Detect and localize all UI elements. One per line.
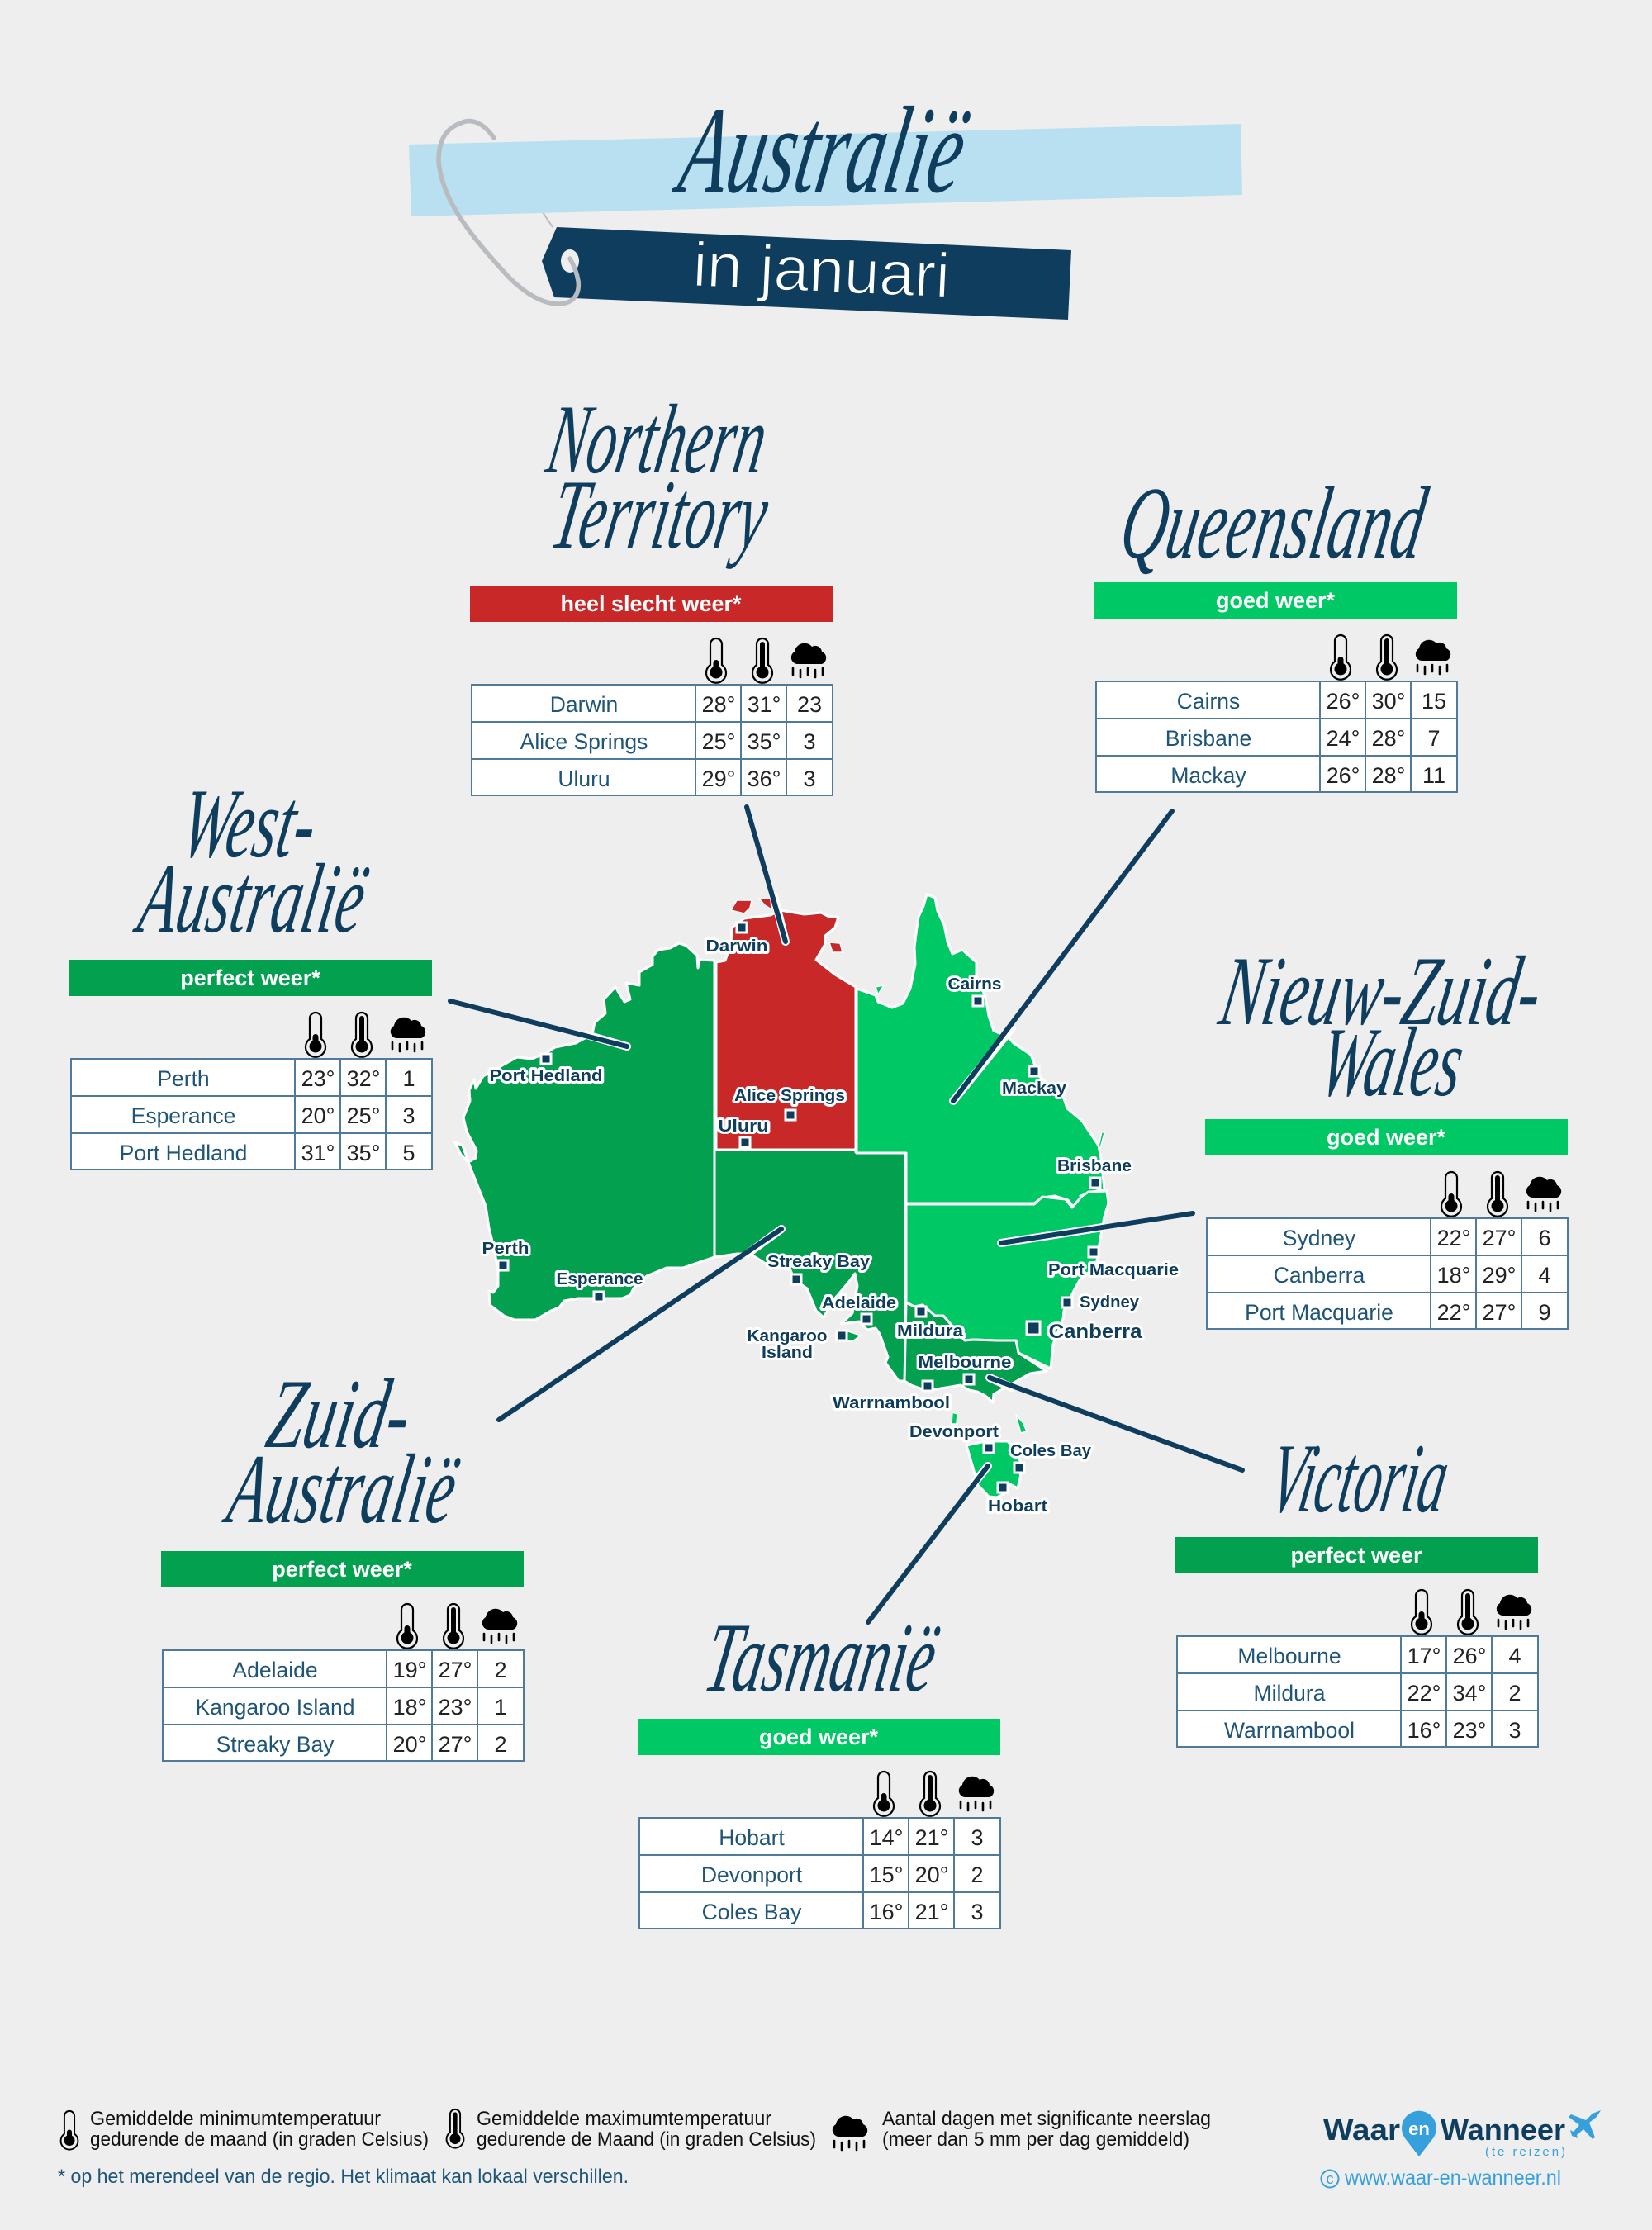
city: Hobart: Hobart (988, 1497, 1047, 1516)
city: Melbourne (919, 1354, 1011, 1384)
map of Australia (455, 894, 1108, 1497)
region: Victoria (904, 1302, 1047, 1402)
table: cities: 22° (1408, 1681, 1441, 1706)
rating: perfect weer: perfect weer* (180, 966, 320, 990)
table: cities: Kangaroo Island (195, 1695, 355, 1720)
city markers and labels (482, 923, 1179, 1516)
tag: in januari: in januari (691, 230, 952, 311)
city: Alice Springs (734, 1087, 845, 1120)
city: Kangaroo Island: Kangaroo (747, 1327, 828, 1345)
table: cities: 1 (402, 1066, 415, 1091)
table: cities (1177, 1636, 1538, 1747)
table: cities: Perth (157, 1066, 210, 1091)
icon: map pin (1402, 2111, 1436, 2156)
table: cities (1207, 1218, 1568, 1329)
leader: Queensland (953, 811, 1172, 1101)
city: Brisbane (1057, 1157, 1132, 1188)
city: Mildura (897, 1307, 964, 1340)
leader: Victoria (990, 1378, 1242, 1470)
table: cities (639, 1818, 1000, 1929)
panel: Victoria (1175, 1424, 1538, 1747)
table: cities: 26° (1453, 1644, 1486, 1668)
table: cities: 36° (748, 766, 781, 791)
city: Devonport (909, 1423, 999, 1453)
table: cities: Esperance (131, 1103, 235, 1128)
table: cities: 4 (1538, 1263, 1551, 1288)
rating: perfect weer: perfect weer (1290, 1543, 1422, 1568)
footnote: * op het merendeel van de regio. Het klimaat kan lokaal verschillen. (58, 2166, 629, 2188)
legend: minimum temperature: Gemiddelde minimumtemperatuur (90, 2108, 381, 2130)
table: cities: Warrnambool (1224, 1718, 1355, 1743)
table: cities: Devonport (701, 1862, 803, 1887)
city: Melbourne: Melbourne (919, 1354, 1011, 1372)
table: cities: 35° (347, 1141, 380, 1165)
column icons (1412, 1590, 1531, 1635)
table: cities: 3 (803, 729, 816, 754)
table: cities: Coles Bay (702, 1900, 802, 1924)
city: Adelaide: Adelaide (822, 1294, 896, 1312)
city: Perth (482, 1240, 529, 1270)
panel: Nieuw-Zuid-Wales (1205, 937, 1568, 1329)
logo: Waar en Wanneer: Wanneer (1441, 2113, 1565, 2147)
table: cities: 21° (915, 1900, 948, 1924)
table: cities: 7 (1427, 726, 1441, 751)
website link: www.waar-en-wanneer.nl (1344, 2166, 1561, 2190)
table: cities: 24° (1327, 726, 1360, 751)
table: cities: Port Hedland (120, 1141, 247, 1165)
table: cities: 4 (1508, 1644, 1521, 1668)
logo: Waar en Wanneer: en (1408, 2118, 1430, 2139)
table: cities: 5 (402, 1141, 415, 1165)
table: cities: 2 (494, 1658, 507, 1682)
table: cities: Port Macquarie (1245, 1300, 1393, 1325)
table: cities: 27° (439, 1658, 472, 1682)
table: cities: 1 (494, 1695, 507, 1720)
city: Port Macquarie: Port Macquarie (1048, 1261, 1179, 1279)
region: Tasmanië (966, 1441, 1022, 1497)
leader: West-Australië (450, 1001, 627, 1046)
city: Brisbane: Brisbane (1057, 1157, 1132, 1175)
region: Zuid-Australië (714, 1150, 905, 1381)
table: cities: 29° (702, 766, 735, 791)
table: cities: 35° (748, 729, 781, 754)
table: cities: 18° (393, 1695, 426, 1720)
legend: minimum temperature: gedurende de maand (in graden Celsius) (90, 2128, 429, 2151)
city: Warrnambool: Warrnambool (833, 1394, 950, 1412)
table: cities: 32° (347, 1066, 380, 1091)
table: cities: 14° (870, 1825, 903, 1850)
rating: goed weer: goed weer* (1216, 588, 1336, 613)
table: cities: 26° (1327, 763, 1360, 788)
table: cities: 3 (402, 1103, 415, 1128)
rating: goed weer (1205, 1119, 1568, 1155)
table: cities: 15 (1422, 689, 1446, 714)
city: Esperance: Esperance (557, 1270, 643, 1288)
rating: heel slecht weer: heel slecht weer* (560, 591, 742, 616)
city: Streaky Bay: Streaky Bay (767, 1253, 871, 1271)
islands: Queensland (876, 985, 1104, 1148)
table: cities: Cairns (1177, 689, 1240, 714)
rating: perfect weer (69, 960, 432, 996)
panel: Zuid-Australië (161, 1359, 524, 1761)
heading: West-Australië: West- (173, 769, 325, 879)
city: Kangaroo Island (747, 1327, 847, 1362)
logo: Waar en Wanneer: Waar (1323, 2113, 1400, 2147)
leader: Tasmanië (868, 1466, 988, 1622)
table: cities: 6 (1538, 1226, 1551, 1250)
table: cities: 3 (803, 766, 816, 791)
city: Hobart (988, 1483, 1047, 1516)
panel: Tasmanië (638, 1603, 1000, 1929)
table: cities: Uluru (558, 766, 610, 791)
rating: goed weer: goed weer* (1327, 1125, 1446, 1150)
table: cities: Canberra (1274, 1263, 1365, 1288)
rating: heel slecht weer (470, 586, 833, 622)
table: cities: 34° (1453, 1681, 1486, 1706)
city: Alice Springs: Alice Springs (734, 1087, 845, 1105)
column icons (706, 638, 826, 683)
legend: rain days (833, 2108, 1211, 2151)
column icons (874, 1772, 994, 1816)
table: cities: Alice Springs (520, 729, 648, 754)
table: cities: 28° (1372, 726, 1405, 751)
table: cities: 31° (301, 1141, 335, 1165)
heading: Northern Territory: Northern (539, 385, 776, 495)
heading: Queensland: Queensland (1113, 467, 1435, 581)
heading: Nieuw-Zuid-Wales: Wales (1312, 1008, 1472, 1117)
region: Nieuw-Zuid-Wales (906, 1191, 1108, 1369)
table: cities: 16° (870, 1900, 903, 1924)
region: Queensland (857, 894, 1104, 1208)
city: Mackay (1002, 1066, 1067, 1098)
city: Adelaide (822, 1294, 896, 1324)
table: cities: Darwin (550, 692, 618, 717)
city: Devonport: Devonport (909, 1423, 999, 1441)
city: Darwin: Darwin (705, 937, 768, 956)
city: Darwin (705, 923, 768, 956)
table: cities: Brisbane (1165, 726, 1251, 751)
table: cities: 11 (1422, 763, 1446, 788)
table: cities: Sydney (1283, 1226, 1356, 1250)
legend: minimum temperature (61, 2108, 429, 2151)
city: Cairns: Cairns (948, 975, 1001, 994)
rating: perfect weer (161, 1551, 524, 1587)
title: Australië (667, 81, 977, 219)
table: cities: 2 (971, 1862, 984, 1887)
city: Coles Bay (1010, 1442, 1092, 1473)
islands: Bass Strait (952, 1412, 1027, 1433)
city: Kangaroo Island: Island (762, 1344, 813, 1362)
column icons (306, 1013, 425, 1057)
title block (409, 81, 1242, 320)
table: cities: 16° (1408, 1718, 1441, 1743)
table: cities: 3 (971, 1900, 984, 1924)
table: cities: 19° (393, 1658, 426, 1682)
rating: goed weer (1094, 582, 1457, 619)
table: cities: Adelaide (232, 1658, 318, 1682)
table: cities: 3 (1508, 1718, 1521, 1743)
table: cities: 23 (797, 692, 822, 717)
legend: maximum temperature (447, 2108, 816, 2151)
table: cities: 27° (439, 1732, 472, 1757)
city: Perth: Perth (482, 1240, 529, 1258)
string loop (439, 121, 578, 304)
table: cities (1096, 681, 1457, 792)
logo: Waar en Wanneer (1322, 2110, 1601, 2190)
table: cities: 20° (393, 1732, 426, 1757)
panel: Northern Territory (470, 385, 833, 795)
heading: Northern Territory: Territory (544, 460, 776, 570)
table: cities: 26° (1327, 689, 1360, 714)
city: Port Hedland (489, 1054, 603, 1085)
city: Coles Bay: Coles Bay (1010, 1442, 1092, 1460)
column icons (1441, 1172, 1561, 1217)
table: cities: 23° (439, 1695, 472, 1720)
legend (58, 2108, 1211, 2188)
table: cities: 15° (870, 1862, 903, 1887)
column icons (1331, 635, 1450, 680)
table: cities (71, 1059, 432, 1170)
panel: Queensland (1094, 467, 1457, 792)
legend: maximum temperature: gedurende de Maand (in graden Celsius) (477, 2128, 816, 2151)
legend: rain days: (meer dan 5 mm per dag gemiddeld) (882, 2128, 1189, 2151)
table: cities (163, 1650, 524, 1761)
website link: c (1327, 2171, 1333, 2187)
table: cities: 27° (1483, 1226, 1516, 1250)
heading: Zuid-Australië (217, 1359, 466, 1544)
city: Sydney: Sydney (1080, 1293, 1140, 1312)
table: cities: 30° (1372, 689, 1405, 714)
heading: Nieuw-Zuid-Wales (1213, 937, 1550, 1117)
city: Uluru (719, 1117, 768, 1147)
tag: in januari (542, 227, 1071, 320)
table: cities: 28° (1372, 763, 1405, 788)
rating: goed weer (638, 1719, 1000, 1755)
region: Northern Territory (716, 910, 856, 1150)
heading: Zuid-Australië: Australië (217, 1435, 466, 1544)
table: cities: 22° (1437, 1300, 1470, 1325)
table: cities: 23° (301, 1066, 335, 1091)
table: cities: 22° (1437, 1226, 1470, 1250)
table: cities: Streaky Bay (216, 1732, 335, 1757)
city: Canberra: Canberra (1049, 1321, 1142, 1343)
table: cities: 23° (1453, 1718, 1486, 1743)
table: cities: 21° (915, 1825, 948, 1850)
table: cities: 20° (301, 1103, 335, 1128)
city: Mackay: Mackay (1002, 1079, 1067, 1098)
leader: Northern Territory (747, 807, 786, 942)
table: cities: Hobart (719, 1825, 785, 1850)
table: cities: 17° (1408, 1644, 1441, 1668)
table: cities: 2 (494, 1732, 507, 1757)
column icons (397, 1604, 517, 1649)
rating: goed weer: goed weer* (759, 1725, 879, 1749)
table: cities (472, 685, 833, 795)
table: cities: Mildura (1254, 1681, 1326, 1706)
logo: Waar en Wanneer: (te reizen) (1485, 2145, 1565, 2159)
table: cities: 28° (702, 692, 735, 717)
islands: Northern Territory (731, 899, 843, 952)
title banner (409, 124, 1242, 216)
icon: airplane (1569, 2110, 1601, 2139)
table: cities: 9 (1538, 1300, 1551, 1325)
table: cities: 20° (915, 1862, 948, 1887)
leader: Zuid-Australië (499, 1229, 781, 1420)
rating: perfect weer (1175, 1537, 1538, 1573)
region: West-Australië (455, 943, 714, 1320)
table: cities: 29° (1483, 1263, 1516, 1288)
heading: West-Australië: Australië (128, 844, 375, 954)
heading: Tasmanië: Tasmanië (697, 1603, 946, 1713)
heading: Zuid-Australië: Zuid- (259, 1359, 420, 1469)
table: cities: 27° (1483, 1300, 1516, 1325)
legend: maximum temperature: Gemiddelde maximumtemperatuur (477, 2108, 771, 2130)
table: cities: 3 (971, 1825, 984, 1850)
rating: perfect weer: perfect weer* (272, 1557, 412, 1582)
table: cities: 25° (347, 1103, 380, 1128)
panel: West-Australië (69, 769, 432, 1170)
city: Mildura: Mildura (897, 1322, 964, 1340)
table: cities: 18° (1437, 1263, 1470, 1288)
table: cities: Mackay (1170, 763, 1246, 788)
table: cities: 2 (1508, 1681, 1521, 1706)
table: cities: 25° (702, 729, 735, 754)
city: Port Hedland: Port Hedland (489, 1067, 603, 1085)
heading: Northern Territory (539, 385, 776, 570)
city: Streaky Bay (767, 1253, 871, 1284)
legend: rain days: Aantal dagen met significante neerslag (882, 2108, 1211, 2130)
city: Warrnambool (833, 1381, 950, 1412)
leader: Nieuw-Zuid-Wales (1001, 1213, 1193, 1243)
city: Cairns (948, 975, 1001, 1006)
island: Kangaroo Island (836, 1331, 861, 1341)
city: Uluru: Uluru (719, 1117, 768, 1136)
leader lines (450, 807, 1242, 1622)
city: Port Macquarie (1048, 1247, 1179, 1279)
table: cities: 31° (748, 692, 781, 717)
table: cities: Melbourne (1237, 1644, 1341, 1668)
heading: West-Australië (128, 769, 375, 954)
city: Esperance (557, 1270, 643, 1302)
heading: Victoria: Victoria (1262, 1424, 1457, 1534)
